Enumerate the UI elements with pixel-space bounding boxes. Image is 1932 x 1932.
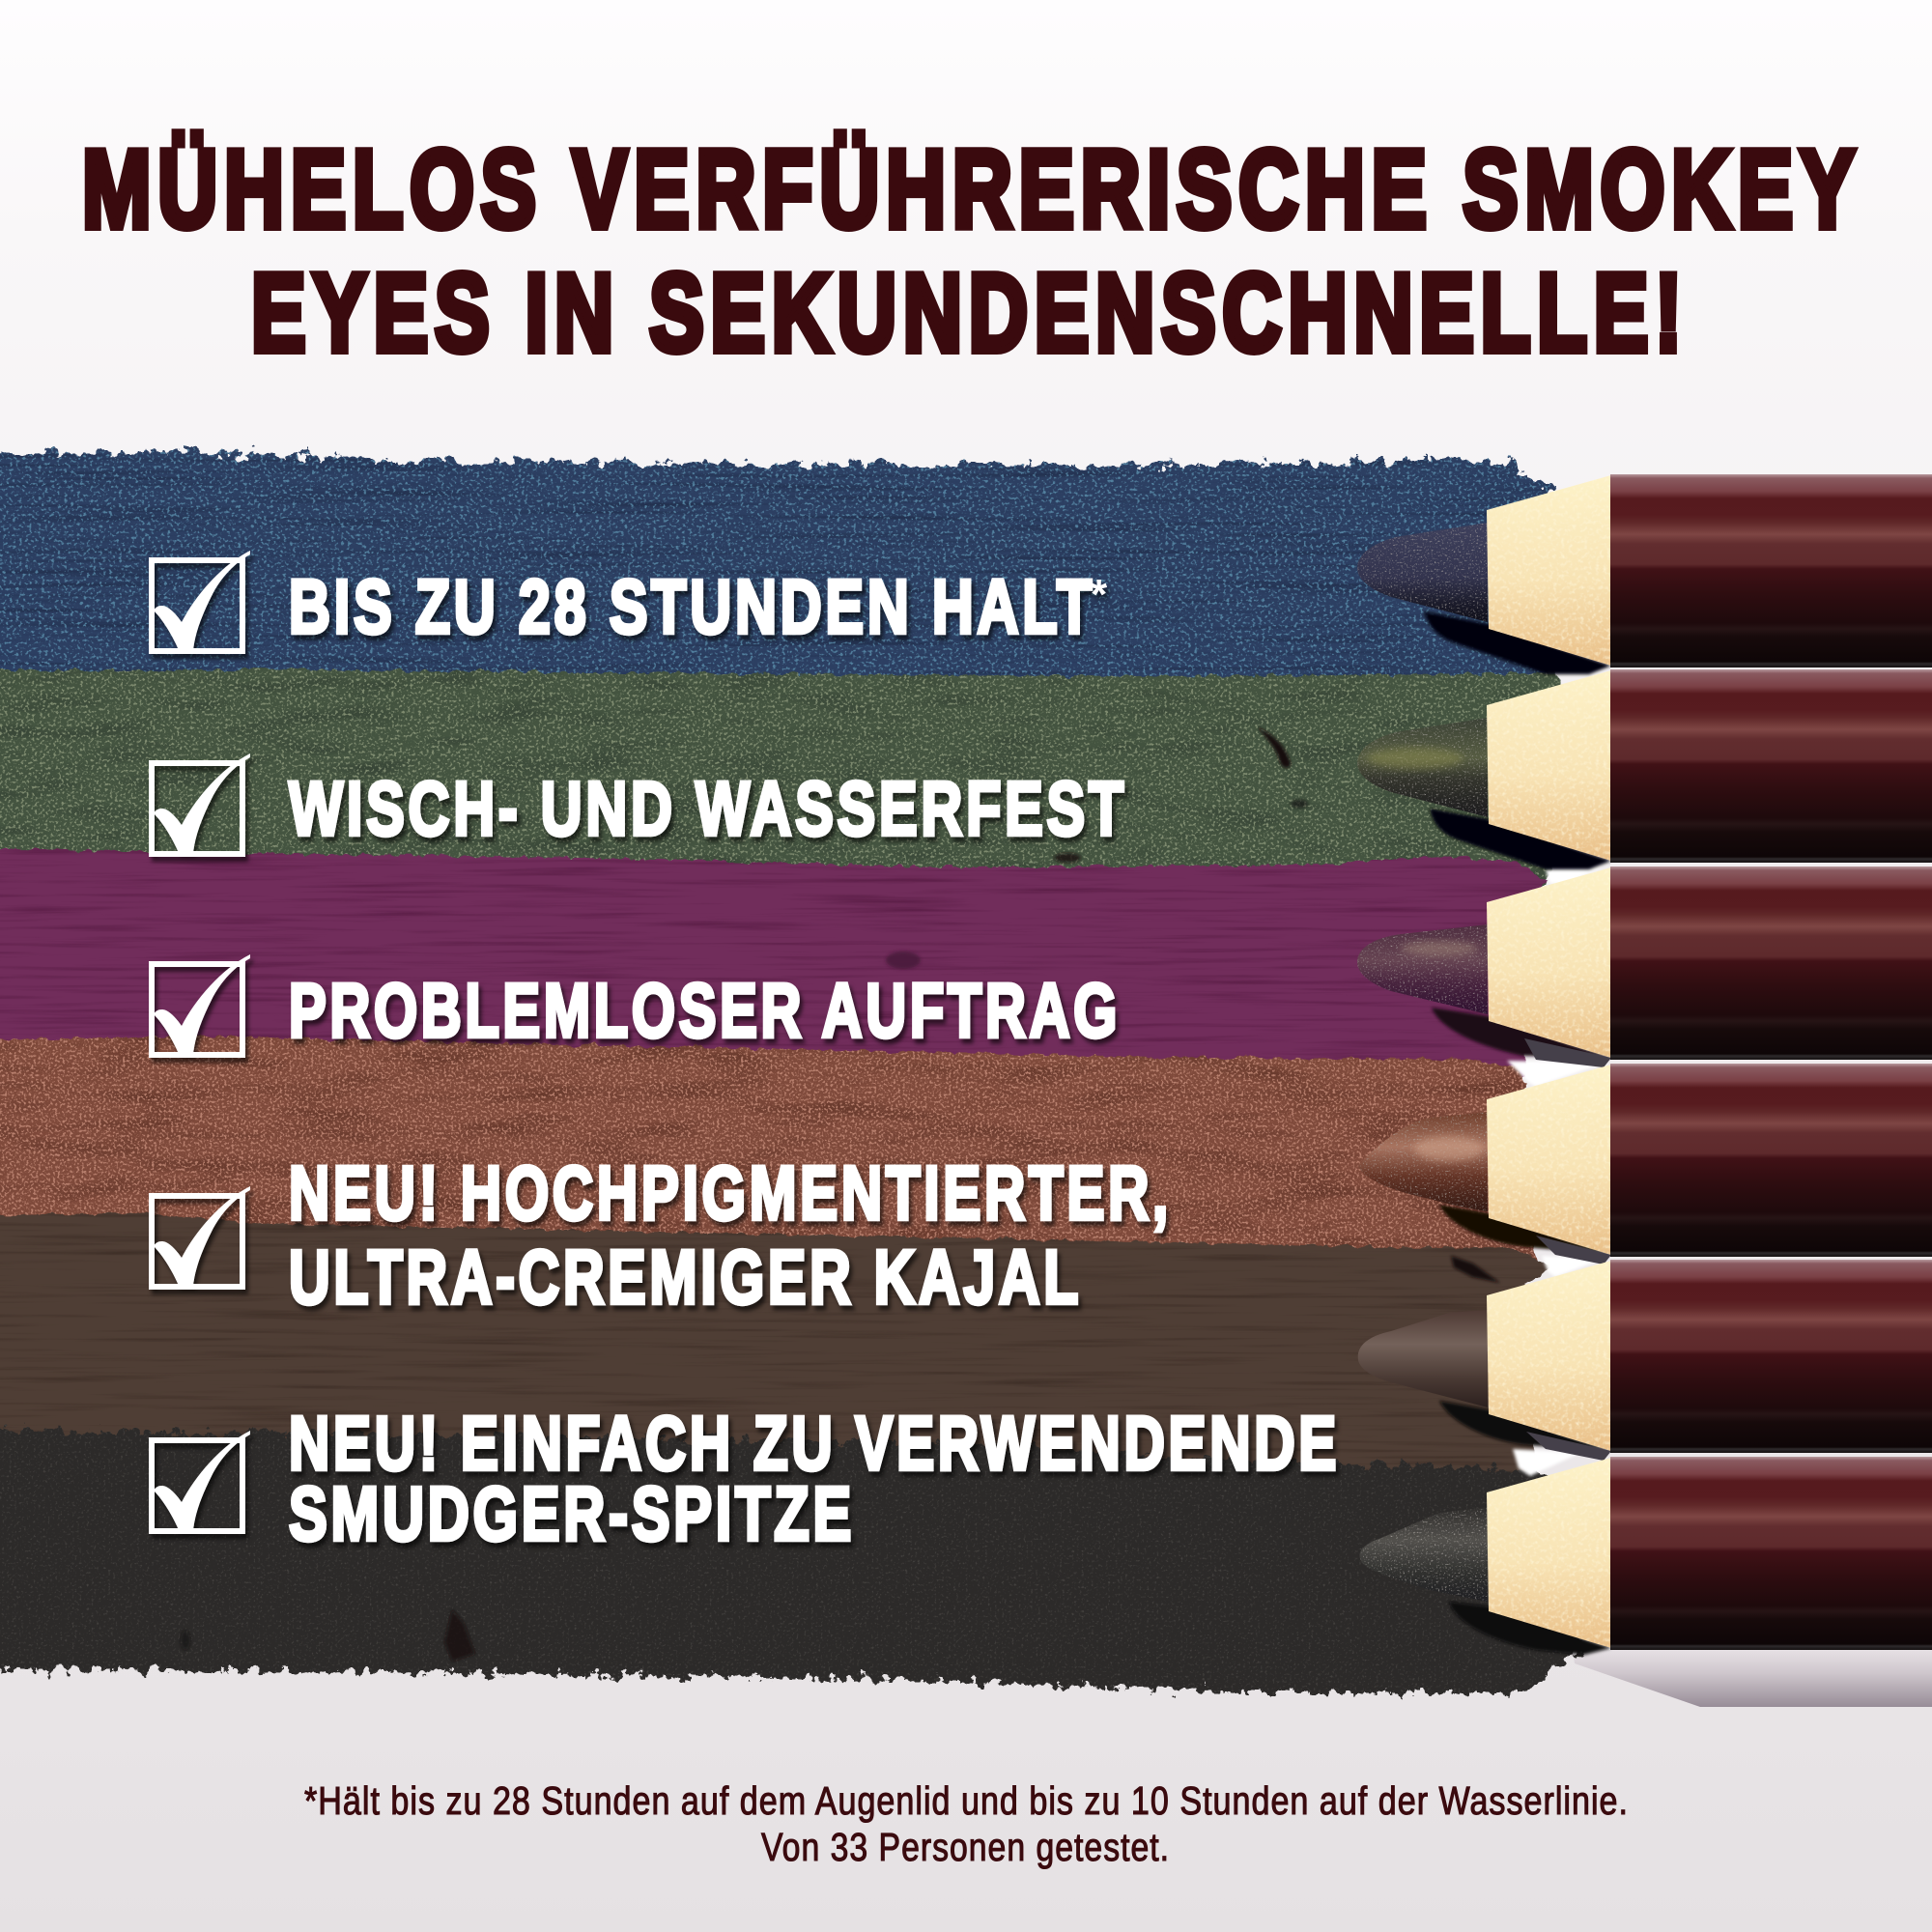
benefit text: PROBLEMLOSER AUFTRAG — [289, 967, 1121, 1053]
cast shadow under the pencils — [1573, 1650, 1932, 1707]
lead tip — [1357, 718, 1488, 817]
lead tip — [1357, 924, 1488, 1014]
benefit 3 — [152, 954, 1121, 1055]
benefit text: BIS ZU 28 STUNDEN HALT — [289, 563, 1095, 649]
icon: checkbox — [152, 551, 250, 651]
footnote marker: * — [1091, 571, 1108, 618]
wood cone — [1487, 670, 1611, 861]
benefit text: WISCH- UND WASSERFEST — [289, 765, 1127, 851]
lead tip — [1358, 1310, 1488, 1407]
swatch: purple — [0, 848, 1548, 1077]
lead tip — [1357, 523, 1488, 622]
benefit 1 — [152, 551, 1108, 651]
icon: checkbox — [152, 954, 250, 1055]
swatch: black — [0, 1431, 1584, 1692]
barrel — [1610, 474, 1932, 668]
pencil 6: black — [1359, 1457, 1932, 1655]
swatch: brown — [0, 1213, 1553, 1483]
wood cone — [1487, 867, 1611, 1058]
lead sheen — [1401, 941, 1478, 956]
swatches: makeup strokes — [0, 452, 1584, 1692]
barrel — [1610, 1260, 1932, 1453]
wood cone — [1487, 1261, 1611, 1451]
benefit 4 — [152, 1150, 1172, 1320]
lead sheen — [1367, 748, 1463, 769]
wood cone — [1487, 1458, 1611, 1648]
icon: checkbox — [152, 1431, 250, 1531]
grey shadow wedge — [1526, 1432, 1611, 1461]
icon: checkbox — [152, 753, 250, 854]
swatch: copper — [0, 1036, 1536, 1261]
lead tip — [1359, 1507, 1488, 1602]
grey shadow wedge — [1536, 1236, 1611, 1264]
pencil 3: purple — [1357, 867, 1932, 1067]
contact shadow — [1439, 1401, 1611, 1451]
footnote line 2: Von 33 Personen getestet. — [761, 1825, 1170, 1869]
wood cone — [1487, 1065, 1611, 1255]
footnote line 1: *Hält bis zu 28 Stunden auf dem Augenlid und bis zu 10 Stunden auf der Wasserlinie. — [304, 1778, 1629, 1823]
benefit text line 1: NEU! EINFACH ZU VERWENDENDE — [289, 1400, 1340, 1486]
swatch: green — [0, 669, 1584, 884]
pencil 5: brown — [1358, 1260, 1932, 1461]
pencil 2: green — [1357, 669, 1932, 869]
grey shadow wedge — [1524, 1038, 1611, 1067]
icon: checkbox — [152, 1186, 250, 1287]
pencil 4: copper — [1358, 1064, 1932, 1264]
contact shadow — [1424, 611, 1611, 674]
benefit text line 1: NEU! HOCHPIGMENTIERTER, — [289, 1150, 1172, 1236]
footnote — [304, 1778, 1629, 1869]
barrel — [1610, 1064, 1932, 1257]
pigment flecks — [181, 726, 1500, 1662]
benefit 2 — [152, 753, 1127, 854]
white gaps between swatch ends and pencils — [1507, 867, 1605, 1476]
contact shadow — [1430, 809, 1611, 869]
benefit text line 2: ULTRA-CREMIGER KAJAL — [289, 1234, 1082, 1320]
benefit 5 — [152, 1400, 1340, 1556]
benefit text line 2: SMUDGER-SPITZE — [289, 1470, 855, 1556]
barrel — [1610, 867, 1932, 1060]
lead sheen — [1414, 1136, 1484, 1161]
pencil 1: blue — [1357, 474, 1932, 674]
barrel — [1610, 669, 1932, 863]
contact shadow — [1449, 1602, 1611, 1655]
swatch: blue — [0, 452, 1555, 700]
lead tip — [1358, 1112, 1488, 1211]
title — [82, 128, 1861, 375]
wood cone — [1487, 475, 1611, 666]
contact shadow — [1432, 1008, 1611, 1058]
contact shadow — [1439, 1205, 1611, 1255]
barrel — [1610, 1457, 1932, 1650]
